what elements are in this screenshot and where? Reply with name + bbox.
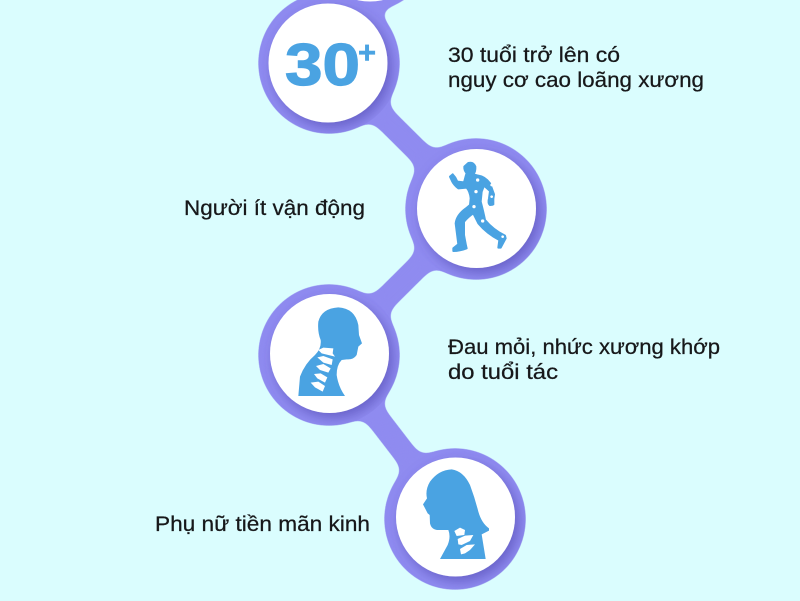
text: sedentary: Người ít vận động [184,196,365,220]
text: joint pain: Đau mỏi, nhức xương khớp [448,335,720,359]
timeline connector chain [258,0,547,590]
30+ label: + [358,35,376,70]
text: 30 plus: nguy cơ cao loãng xương [448,68,704,92]
icon: head with spine [298,307,362,396]
previous circle remnant [310,0,430,2]
text: joint pain: do tuổi tác [448,360,558,384]
text: 30 plus: 30 tuổi trở lên có [448,43,620,67]
step 1: 30+ badge [268,4,388,122]
30+ label [286,42,376,86]
step 4: woman badge [396,458,515,576]
icon: woman with spine [423,469,489,559]
step 2: runner badge [417,149,536,268]
text: menopause: Phụ nữ tiền mãn kinh [155,512,370,536]
30+ label: 30 [285,32,360,98]
step 3: neck badge [270,294,389,413]
text: joint pain [448,335,720,384]
icon: runner [450,163,506,251]
text: 30 plus [448,43,704,92]
